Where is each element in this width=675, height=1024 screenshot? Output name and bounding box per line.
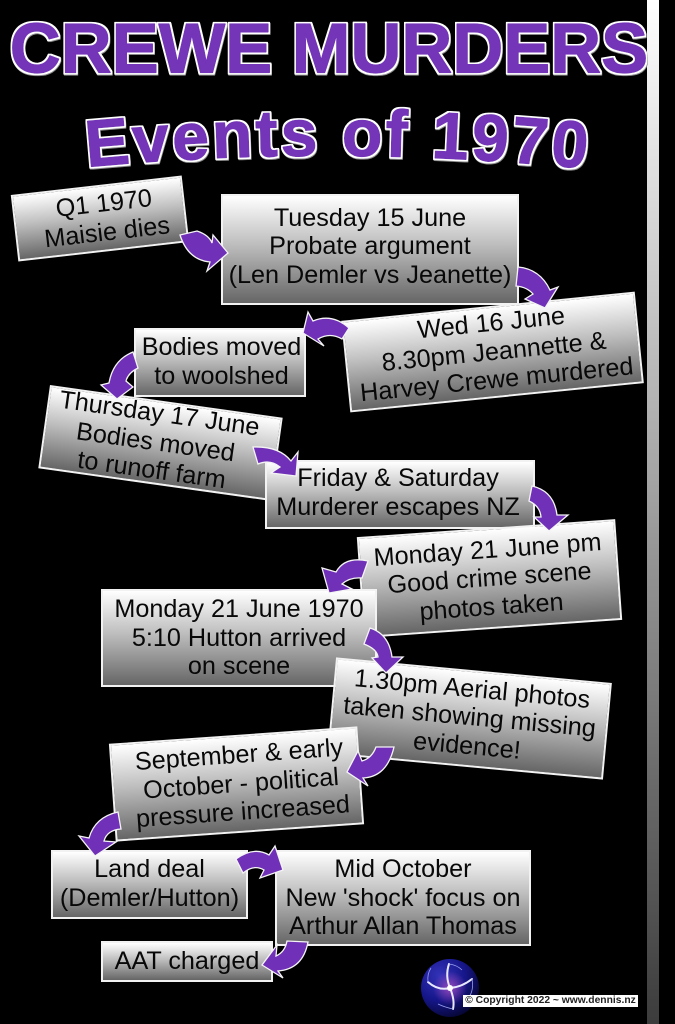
arrow: Thursday to Friday <box>253 447 298 476</box>
box: Thursday 17 June: to runoff farm <box>76 446 228 495</box>
box: Friday and Saturday <box>265 460 535 529</box>
arrow: aerial photos to September <box>347 747 394 786</box>
box: Wed 16 June: Harvey Crewe murdered <box>359 352 635 408</box>
box: Monday 21 June pm: photos taken <box>419 588 564 626</box>
arrow: Friday to Monday pm <box>529 486 568 531</box>
box: AAT charged: AAT charged <box>115 947 259 975</box>
arrow: Bodies moved to Thursday <box>101 352 138 399</box>
box: Monday 21 June 1970: 5:10 Hutton arrived <box>132 624 346 652</box>
box: Tuesday 15 June <box>221 194 519 305</box>
box: AAT charged <box>101 941 273 982</box>
box: 1.30pm aerial photos <box>327 657 612 780</box>
heading: Events of 1970: Events of 1970 <box>85 106 588 171</box>
box: Land deal: (Demler/Hutton) <box>60 884 239 912</box>
box: Land deal: Land deal <box>94 855 205 883</box>
box: Friday and Saturday: Friday & Saturday <box>297 464 499 492</box>
arrow: Tuesday to Wed <box>516 267 558 308</box>
arrow: Wed to Bodies moved <box>303 312 349 346</box>
box: Monday 21 June 1970: Monday 21 June 1970 <box>114 595 364 623</box>
box: Tuesday 15 June: Tuesday 15 June <box>274 204 466 232</box>
box: Monday 21 June pm: Monday 21 June pm <box>373 528 602 572</box>
box: 1.30pm aerial photos: taken showing missing <box>342 692 597 743</box>
box: Wed 16 June: 8.30pm Jeannette & <box>380 326 608 377</box>
box: Bodies moved to woolshed: to woolshed <box>154 362 289 390</box>
box: Monday 21 June pm: Good crime scene <box>387 557 592 599</box>
box: Mid October: Arthur Allan Thomas <box>289 912 517 940</box>
box: Wed 16 June: Wed 16 June <box>416 302 566 345</box>
box: September and early October <box>109 726 364 842</box>
box: Mid October <box>275 850 531 946</box>
title block <box>10 8 648 171</box>
arrow: Mid October to AAT charged <box>262 941 308 978</box>
box: Thursday 17 June: Thursday 17 June <box>58 386 261 442</box>
box: September and early October: pressure increased <box>135 790 351 833</box>
box: Friday and Saturday: Murderer escapes NZ <box>276 492 520 520</box>
box: Mid October: New 'shock' focus on <box>285 884 520 912</box>
box: Bodies moved to woolshed: Bodies moved <box>142 333 301 361</box>
box: Monday 21 June 1970 <box>101 589 377 687</box>
arrow: Q1 to Tuesday <box>180 231 228 271</box>
box: Q1 1970: Maisie dies <box>43 211 171 253</box>
box: Q1 1970: Q1 1970 <box>54 184 153 223</box>
box: Tuesday 15 June: Probate argument <box>269 232 471 260</box>
box: Thursday 17 June: Bodies moved <box>75 417 237 467</box>
arrow: Monday pm to Monday 1970 <box>322 560 368 593</box>
box: Thursday 17 June <box>38 385 283 501</box>
box: September and early October: September & early <box>134 734 344 776</box>
arrow: Land deal to Mid October <box>236 846 283 878</box>
box: Mid October: Mid October <box>334 855 472 883</box>
box: 1.30pm aerial photos: 1.30pm Aerial photos <box>353 664 591 714</box>
box: Tuesday 15 June: (Len Demler vs Jeanette) <box>229 261 511 289</box>
side gradient bar <box>647 0 659 1024</box>
box: September and early October: October - political <box>142 763 340 804</box>
box: Monday 21 June pm <box>357 519 622 638</box>
box: 1.30pm aerial photos: evidence! <box>412 727 522 765</box>
arrow: Monday 1970 to aerial photos <box>364 628 403 673</box>
copyright label: © Copyright 2022 ~ www.dennis.nz <box>465 995 636 1006</box>
box: Bodies moved to woolshed <box>134 328 306 397</box>
arrow: September to Land deal <box>79 812 121 856</box>
box: Q1 1970 <box>11 175 189 262</box>
box: Land deal <box>51 850 248 919</box>
box: Wed 16 June <box>341 292 644 412</box>
box: Monday 21 June 1970: on scene <box>188 652 290 680</box>
heading: Crewe Murders: CREWE MURDERS <box>10 8 648 88</box>
